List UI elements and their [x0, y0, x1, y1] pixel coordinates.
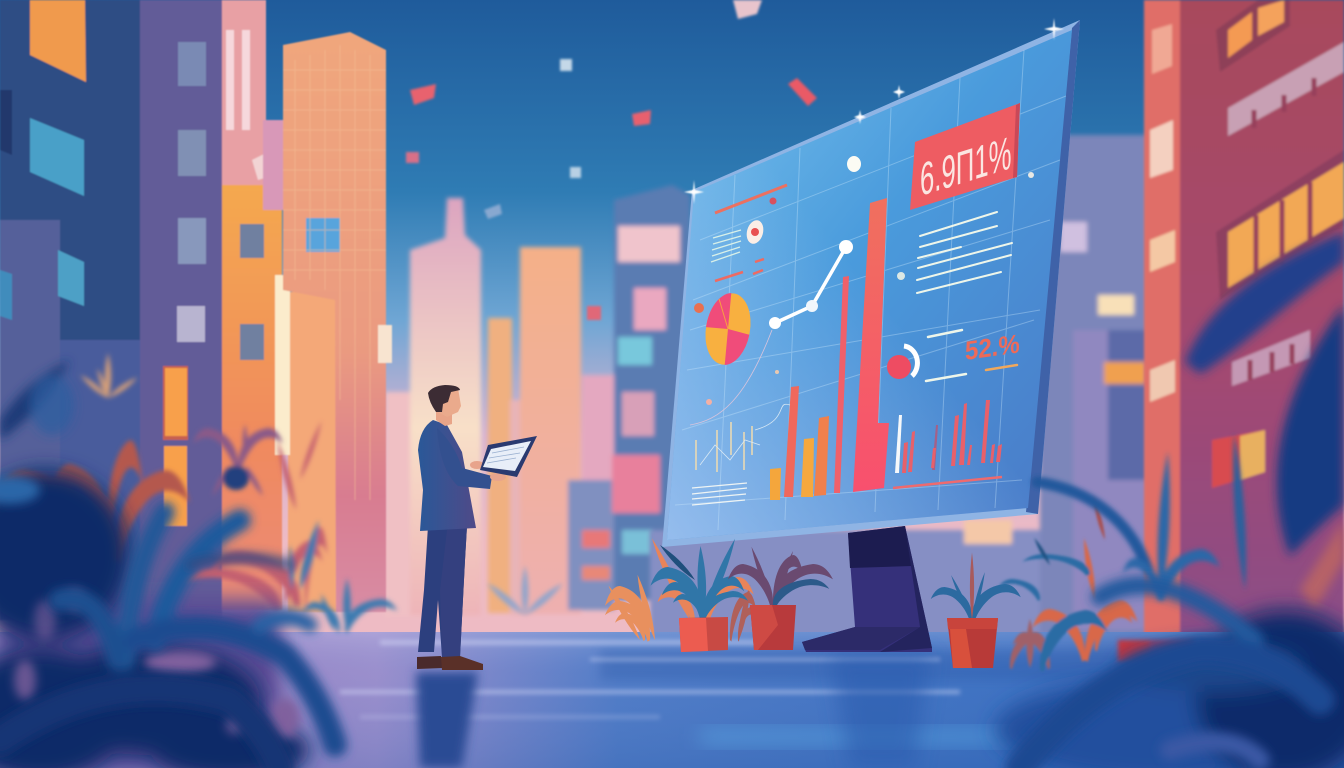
dark upper leaf: [1185, 232, 1344, 374]
donut chart: [887, 346, 917, 379]
headline value tag: 6.9Π1%: [920, 128, 1012, 207]
line chart: [769, 240, 853, 329]
text lines upper left: [711, 230, 741, 262]
big dark leaf: [1277, 305, 1344, 556]
shoes: [417, 656, 483, 670]
tall red bars: [834, 198, 889, 493]
mid-ground plants left: [0, 353, 565, 633]
sparkles: [684, 18, 1064, 204]
foreground mass: [995, 610, 1344, 768]
text lines right: [917, 212, 1012, 293]
distant blue plant: [485, 566, 565, 618]
floor: [0, 632, 1344, 768]
right building windows: [1212, 0, 1344, 488]
building windows: [0, 0, 340, 526]
jacket: [418, 420, 476, 531]
giant data billboard: [662, 18, 1080, 547]
blue fronds: [650, 537, 748, 620]
dots on screen: [694, 156, 1034, 405]
rear bush: [730, 584, 757, 643]
man with tablet: [417, 385, 537, 670]
flying paper fragments: [406, 0, 817, 320]
percent label: 52.%: [965, 329, 1020, 366]
pink fern: [182, 420, 328, 611]
reflection of monitor: [830, 655, 930, 768]
small bar chart: [770, 386, 829, 500]
upper left dark leaf: [0, 360, 74, 440]
potted plant: left with orange fronds: [605, 537, 757, 652]
warm glow right: [1300, 520, 1344, 610]
background city: centre towers: [385, 185, 690, 617]
arm: [437, 428, 492, 489]
tower window grid: [283, 45, 386, 500]
legs: [418, 526, 467, 657]
purple undergrowth: [0, 600, 280, 768]
tablet: [480, 436, 537, 477]
purple gaps: [14, 588, 300, 738]
orange bush: [605, 574, 658, 642]
foreground foliage left: [0, 360, 335, 768]
reflection of man: [416, 672, 478, 768]
billboard frame: [662, 20, 1080, 547]
foreground foliage right: [995, 232, 1344, 768]
hands: [470, 461, 506, 481]
text lines lower left: [692, 483, 747, 505]
short rules: [926, 330, 1017, 381]
headline value tag: [910, 103, 1020, 210]
neck and head: [428, 385, 461, 426]
potted plant: right of stand: [931, 552, 1021, 668]
billboard screen: [667, 30, 1072, 540]
sparkline: [690, 330, 790, 472]
monitor stand: [802, 526, 932, 652]
blurred fronds: [0, 512, 335, 768]
pot: [679, 617, 728, 652]
bars right: [895, 400, 1002, 473]
blurred mid plants: [999, 496, 1138, 672]
orange behind blue: [649, 537, 754, 627]
small red markers: [715, 259, 764, 281]
pie chart: [700, 290, 756, 368]
frond bush left: [0, 440, 190, 564]
palm silhouette: [193, 424, 283, 497]
background city: right towers: [650, 135, 1160, 640]
potted plant: middle: [728, 546, 833, 650]
left city buildings: [0, 0, 392, 625]
screen grid: [675, 50, 1066, 530]
dark mass: [0, 470, 310, 768]
blue leaf at fern: [288, 519, 323, 591]
top-left heading rule and icon: [715, 185, 787, 246]
small teal plant: [302, 578, 398, 633]
small tan flower: [79, 353, 139, 400]
baseline: [893, 477, 1002, 488]
right city buildings: [1144, 0, 1344, 640]
